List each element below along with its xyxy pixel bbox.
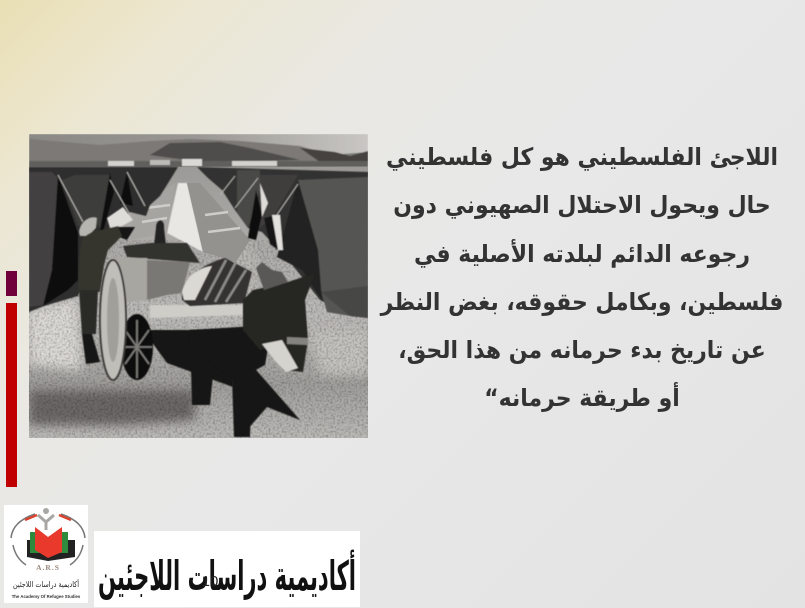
photo: refugee camp tents with donkey cart [29,134,368,438]
calligraphy banner [94,531,360,607]
quote text: فلسطين، وبكامل حقوقه، بغض النظر [381,288,783,316]
logo: Academy of Refugee Studies [4,505,88,603]
man loading cart [78,207,135,364]
quote text: رجوعه الدائم لبلدته الأصلية في [414,240,750,268]
quote text [380,143,783,412]
quote text: أو طريقة حرمانه“ [484,384,680,412]
central white path [167,183,203,252]
quote text: عن تاريخ بدء حرمانه من هذا الحق، [398,336,766,364]
quote text: اللاجئ الفلسطيني هو كل فلسطيني [386,143,778,171]
icon: open book [27,527,75,561]
child in camp [154,220,166,245]
quote text: حال ويحول الاحتلال الصهيوني دون [393,191,771,219]
ground texture [29,240,368,438]
tents left row [29,167,178,312]
ground [29,167,368,438]
tents right row [197,167,368,318]
sky and mountains [29,134,368,168]
accent: small maroon bar [6,271,17,296]
cart with load and wheels [100,243,243,387]
donkey [182,258,315,437]
accent: tall red bar [6,303,17,487]
logo English name: The Academy Of Refugee Studies [12,594,81,599]
icon: arcs and figure [11,508,85,565]
slide number: 10 [202,573,218,590]
logo letters: A.R.S [36,563,60,572]
